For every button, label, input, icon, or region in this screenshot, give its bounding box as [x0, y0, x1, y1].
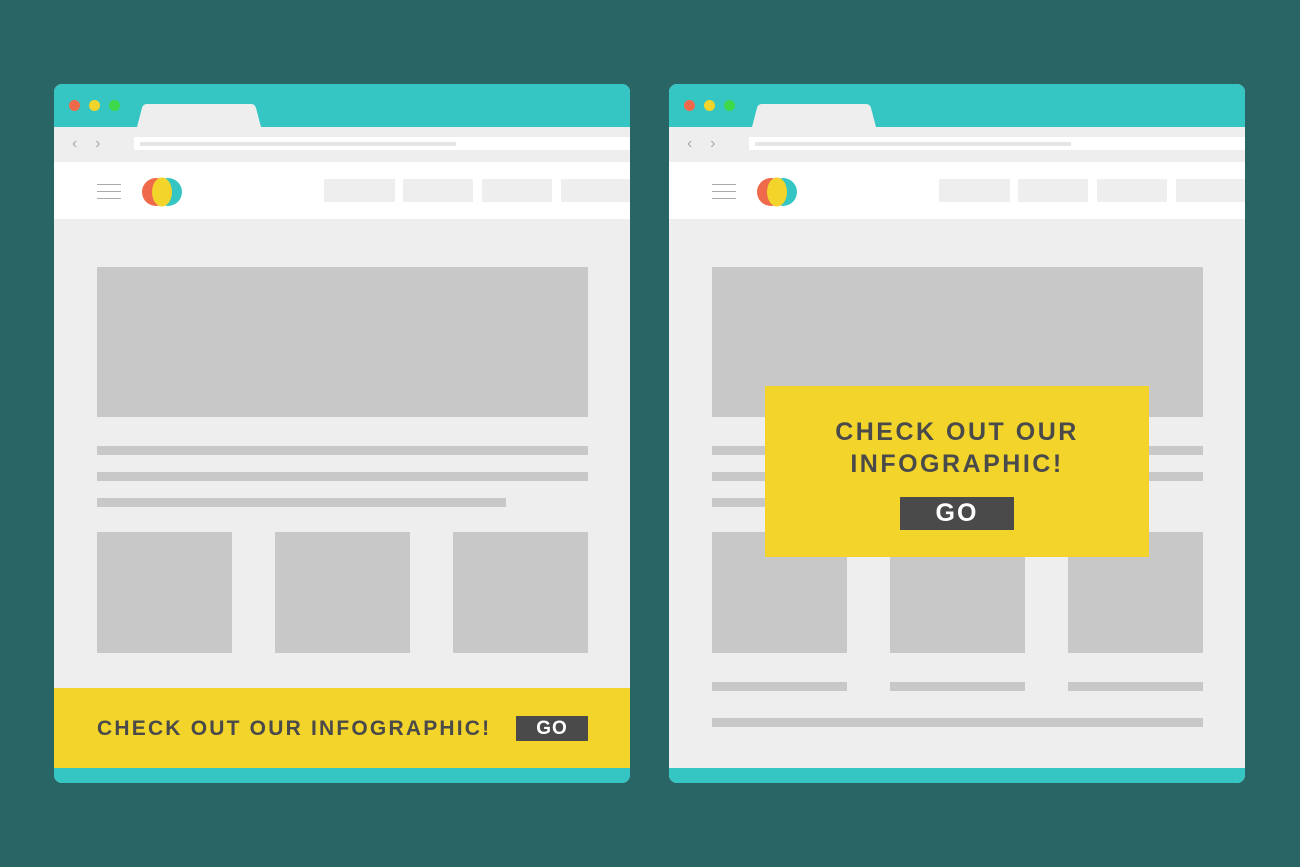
bottom bar	[669, 768, 1245, 783]
GO button	[900, 497, 1014, 530]
address bar	[669, 127, 1245, 162]
hamburger icon	[712, 184, 736, 199]
tab	[752, 104, 876, 127]
popup heading: INFOGRAPHIC!	[850, 450, 1064, 478]
hero image placeholder	[97, 267, 588, 417]
hamburger icon	[97, 184, 121, 199]
top bar	[54, 84, 630, 127]
address bar: ‹ ›	[687, 135, 715, 152]
window dots	[684, 100, 735, 111]
logo	[757, 178, 797, 206]
nav bar	[669, 162, 1245, 219]
nav buttons	[324, 179, 630, 202]
nav bar	[54, 162, 630, 219]
image boxes	[97, 532, 588, 653]
GO button	[516, 716, 588, 741]
tab	[137, 104, 261, 127]
callout bar: CHECK OUT OUR INFOGRAPHIC!	[97, 717, 491, 740]
popup callout	[765, 386, 1149, 557]
text lines	[712, 446, 1203, 507]
popup heading: CHECK OUT OUR	[835, 418, 1079, 446]
GO button: GO	[936, 499, 978, 527]
GO button: GO	[536, 718, 568, 739]
bottom bar	[54, 768, 630, 783]
callout bar	[54, 688, 630, 768]
window dots	[69, 100, 120, 111]
hero image placeholder	[712, 267, 1203, 417]
caption lines	[712, 682, 1203, 727]
nav buttons	[939, 179, 1245, 202]
text lines	[97, 446, 588, 507]
popup heading	[835, 418, 1079, 478]
address bar	[54, 127, 630, 162]
top bar	[669, 84, 1245, 127]
browser window: left	[54, 84, 630, 783]
address bar: ‹ ›	[72, 135, 100, 152]
browser window: right	[669, 84, 1245, 783]
image boxes	[712, 532, 1203, 653]
logo	[142, 178, 182, 206]
